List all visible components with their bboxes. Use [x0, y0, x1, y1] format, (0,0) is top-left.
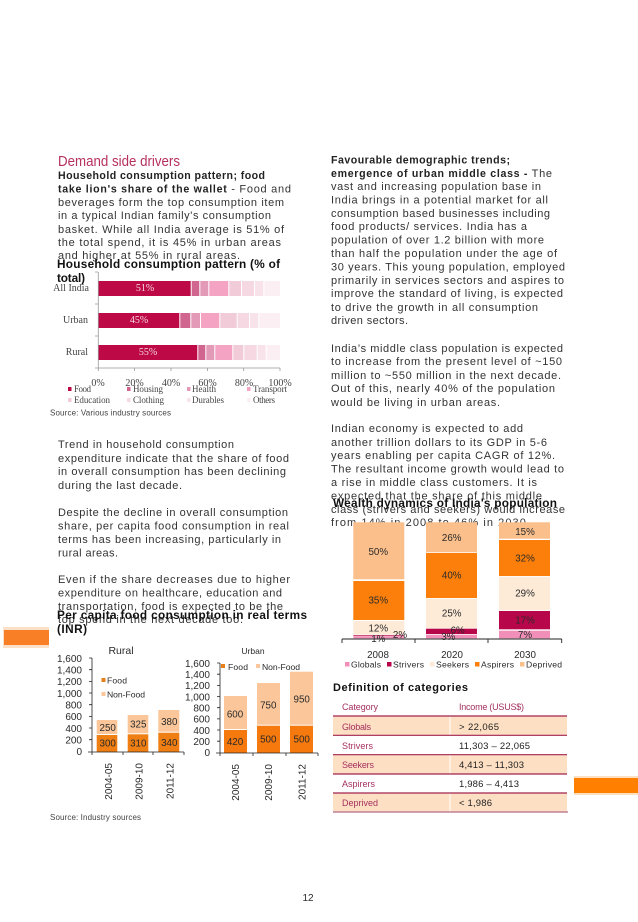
text block: household consumption intro: basket. While all India average is 51% of: [58, 224, 285, 236]
urban value labels: 950: [294, 695, 310, 706]
rural legend: [102, 676, 145, 700]
urban value labels: 600: [227, 709, 244, 720]
legend: Health: [192, 384, 216, 394]
text block: household consumption intro: the total spend, it is 45% in urban areas: [58, 237, 282, 249]
urban y axis labels: 1,200: [185, 681, 210, 692]
urban value labels: 500: [294, 735, 310, 746]
text block: food share trend: Even if the share decreases due to higher: [58, 574, 290, 586]
year labels: [367, 650, 536, 661]
x axis labels: [91, 378, 292, 389]
legend: Education: [74, 395, 110, 405]
urban value labels: 750: [260, 700, 277, 711]
legend: Deprived: [526, 660, 562, 670]
urban value labels: 500: [260, 735, 277, 746]
value labels: 1%: [371, 634, 386, 645]
x axis labels: 80%: [235, 378, 253, 389]
heading: per capita food consumption: Per capita food consumption in real terms: [57, 608, 307, 622]
chart title: Urban: Urban: [241, 646, 265, 656]
rural value labels: 250: [100, 723, 116, 734]
text block: Indian economy: another trillion dollars to its GDP in 5-6: [331, 437, 547, 449]
urban period labels: 2004-05: [231, 764, 242, 801]
text block: food share trend: [58, 439, 290, 626]
row: Seekers: Seekers: [342, 760, 374, 770]
rural y axis labels: 200: [65, 736, 82, 746]
legend: Durables: [192, 395, 224, 405]
text block: household consumption intro: [58, 170, 291, 262]
text block: favourable demographic trends: than half the population under the age of: [331, 248, 558, 260]
value labels: 15%: [515, 527, 535, 538]
legend: Housing: [133, 384, 164, 394]
legend: [68, 384, 287, 405]
legend: [345, 660, 562, 670]
value labels: 25%: [442, 609, 462, 620]
urban legend: Non-Food: [262, 662, 300, 672]
rural value labels: 380: [161, 717, 178, 728]
rural y axis labels: 1,000: [57, 689, 82, 700]
text block: household consumption intro: in a typical Indian family's consumption: [58, 210, 271, 222]
row: Deprived: < 1,986: [459, 798, 492, 809]
rural value labels: 325: [130, 720, 147, 731]
row: Deprived: [342, 798, 492, 809]
legend: Food: [74, 384, 92, 394]
value labels: 2%: [393, 630, 407, 641]
rural period labels: 2004-05: [104, 763, 115, 800]
value labels: 40%: [442, 571, 462, 582]
urban y axis labels: [185, 659, 210, 759]
rural period labels: 2011-12: [166, 763, 176, 799]
rural bars: [97, 710, 179, 752]
bar: Urban: [98, 313, 280, 328]
text block: favourable demographic trends: vast and increasing population base in: [331, 181, 541, 193]
text block: favourable demographic trends: to drive the growth in all consumption: [331, 302, 538, 314]
category labels: Urban: [63, 315, 88, 326]
source note: household chart: Source: Various industry sources: [50, 408, 171, 418]
heading: household consumption pattern chart: total): [57, 271, 85, 285]
text block: Indian economy: years enabling per capita CAGR of 12%.: [331, 450, 555, 462]
heading: household consumption pattern chart: [57, 257, 280, 285]
text block: Indian economy: a rise in middle class customers. It is: [331, 477, 538, 489]
heading: definition of categories: Definition of categories: [333, 682, 468, 694]
rural value labels: 310: [130, 739, 147, 750]
rural y axis labels: 600: [65, 712, 82, 723]
urban y axis labels: 400: [193, 726, 210, 737]
text block: favourable demographic trends: consumption based businesses including: [331, 208, 550, 220]
rural y axis labels: 0: [76, 747, 82, 758]
stacked column chart: wealth dynamics: [342, 522, 562, 670]
urban period labels: [231, 764, 308, 801]
value labels: 26%: [442, 533, 462, 544]
stacked bar chart: rural: [57, 645, 184, 800]
row: Globals: [342, 722, 499, 733]
value labels: 6%: [451, 626, 465, 637]
text block: middle class population: Out of this, nearly 40% of the population: [331, 383, 555, 395]
urban y axis labels: 1,600: [185, 659, 210, 670]
urban y axis labels: 200: [193, 737, 210, 748]
text block: favourable demographic trends: [331, 154, 565, 327]
text block: middle class population: India’s middle class population is expected: [331, 343, 563, 355]
text block: Indian economy: The resultant income growth would lead to: [331, 464, 564, 476]
text block: middle class population: million to ~550 million in the next decade.: [331, 370, 561, 382]
text block: favourable demographic trends: India brings in a potential market for all: [331, 194, 548, 206]
bar: All India: [98, 281, 280, 296]
text block: favourable demographic trends: improve the standard of living, is expected: [331, 288, 563, 300]
text block: food share trend: Trend in household consumption: [58, 439, 234, 451]
text block: Indian economy: expected that the share of this middle: [331, 490, 542, 502]
category labels: [53, 283, 90, 358]
page number: 12: [302, 893, 314, 904]
chart title: Rural: Rural: [108, 645, 134, 657]
text block: food share trend: expenditure on healthcare, education and: [58, 588, 282, 600]
row: Globals: > 22,065: [459, 722, 499, 733]
bar: All India: 51%: [136, 283, 154, 294]
rural y axis labels: 1,600: [57, 654, 82, 665]
stacked bar chart: household consumption pattern: [53, 272, 292, 405]
row: Strivers: [342, 741, 530, 752]
value labels: 35%: [368, 595, 388, 606]
legend: Transport: [253, 384, 287, 394]
year labels: 2030: [514, 650, 536, 661]
heading: household consumption pattern chart: Household consumption pattern (% of: [57, 257, 280, 271]
rural value labels: 300: [100, 739, 116, 750]
text block: Indian economy: [331, 423, 565, 529]
rural value labels: 340: [161, 738, 178, 749]
bar: Urban: 45%: [130, 315, 148, 326]
text block: favourable demographic trends: food products/ services. India has a: [331, 221, 528, 233]
row: Strivers: 11,303 – 22,065: [459, 741, 530, 752]
column: 2020: [426, 522, 477, 638]
value labels: 3%: [441, 632, 456, 643]
text block: household consumption intro: beverages form the top consumption item: [58, 197, 284, 209]
text block: food share trend: transportation, food is expected to be the: [58, 601, 283, 613]
heading: per capita food consumption: (INR): [57, 622, 87, 636]
text block: household consumption intro: take lion's share of the wallet - Food and: [58, 184, 291, 196]
x axis labels: 60%: [198, 378, 217, 389]
legend: Globals: [351, 660, 381, 670]
bar: Rural: 55%: [139, 347, 157, 358]
text block: favourable demographic trends: driven sectors.: [331, 315, 408, 327]
rural y axis labels: [57, 654, 82, 758]
category labels: All India: [53, 283, 90, 294]
heading: wealth dynamics: Wealth dynamics of India's population: [333, 496, 557, 510]
text block: food share trend: during the last decade.: [58, 480, 182, 492]
text block: favourable demographic trends: population of over 1.2 billion with more: [331, 234, 544, 246]
urban y axis labels: 1,000: [185, 692, 210, 703]
x axis labels: 0%: [91, 378, 105, 389]
bar: Rural: [98, 345, 280, 360]
value labels: 50%: [368, 547, 388, 558]
urban period labels: 2011-12: [298, 764, 308, 800]
category labels: Rural: [66, 347, 88, 358]
text block: middle class population: [330, 343, 563, 409]
text block: household consumption intro: Household consumption pattern; food: [58, 170, 265, 182]
text block: Indian economy: from 14% in 2008 to 46% in 2030.: [331, 517, 530, 529]
rural period labels: [104, 763, 176, 800]
row: Strivers: Strivers: [342, 741, 374, 751]
urban y axis labels: 1,400: [185, 670, 210, 681]
row: Aspirers: 1,986 – 4,413: [459, 779, 519, 790]
source note: per capita charts: Source: Industry sources: [50, 813, 141, 822]
row: Deprived: Deprived: [342, 798, 378, 808]
value labels: 32%: [515, 554, 535, 565]
rural y axis labels: 400: [65, 724, 82, 735]
left orange side tab: [3, 627, 49, 648]
legend: Others: [253, 395, 275, 405]
text block: food share trend: top spend in the next decade too.: [58, 614, 243, 626]
stacked bar chart: urban: [185, 646, 318, 801]
urban legend: Food: [228, 662, 248, 672]
row: Globals: Globals: [342, 722, 372, 732]
urban y axis labels: 600: [193, 715, 210, 726]
row: Seekers: [342, 760, 524, 771]
row: Seekers: 4,413 – 11,303: [459, 760, 524, 771]
text block: food share trend: rural areas.: [58, 548, 118, 560]
urban legend: [221, 662, 300, 672]
rural y axis labels: 800: [65, 700, 82, 712]
heading: per capita food consumption: [57, 608, 307, 636]
x axis labels: 20%: [125, 378, 144, 389]
text block: food share trend: in overall consumption has been declining: [58, 466, 286, 478]
urban value labels: 420: [227, 737, 244, 748]
text block: food share trend: terms has been increasing, particularly in: [58, 534, 281, 546]
year labels: 2008: [367, 650, 389, 661]
year labels: 2020: [441, 650, 463, 661]
table header: [342, 702, 524, 712]
right orange side tab: [574, 776, 638, 795]
column: 2008: [353, 522, 404, 638]
row: Aspirers: [342, 779, 519, 790]
column: 2030: [499, 522, 550, 638]
text block: food share trend: Despite the decline in overall consumption: [58, 507, 288, 519]
row: Aspirers: Aspirers: [342, 779, 376, 789]
text block: food share trend: expenditure indicate that the share of food: [58, 453, 289, 465]
text block: household consumption intro: and higher at 55% in rural areas.: [58, 250, 240, 262]
text block: favourable demographic trends: emergence of urban middle class - The: [331, 168, 552, 180]
text block: Indian economy: Indian economy is expected to add: [331, 423, 523, 435]
legend: Seekers: [436, 660, 469, 670]
urban y axis labels: 800: [193, 704, 210, 714]
x axis labels: 100%: [268, 378, 292, 389]
rural y axis labels: 1,400: [57, 666, 82, 676]
value labels: [368, 527, 535, 645]
urban bars: [224, 672, 313, 753]
urban value labels: [227, 695, 310, 748]
value labels: 12%: [368, 624, 388, 635]
text block: favourable demographic trends: primarily in services sectors and aspires to: [331, 275, 564, 287]
x axis labels: 40%: [162, 378, 180, 389]
value labels: 17%: [515, 615, 535, 626]
table header: Income (USUS$): [459, 702, 524, 712]
rural y axis labels: 1,200: [57, 677, 82, 688]
section title: Demand side drivers: Demand side drivers: [58, 154, 180, 170]
text block: middle class population: to increase from the present level of ~150: [331, 356, 562, 368]
rural value labels: [100, 717, 178, 750]
text block: favourable demographic trends: 30 years. This young population, employed: [331, 262, 565, 274]
value labels: 7%: [518, 630, 532, 641]
legend: Strivers: [393, 660, 424, 670]
urban y axis labels: 0: [204, 748, 210, 759]
table: definition of categories: [333, 702, 568, 812]
text block: food share trend: share, per capita food consumption in real: [58, 520, 289, 532]
rural legend: Food: [107, 676, 127, 686]
value labels: 29%: [515, 589, 535, 600]
text block: middle class population: would be living in urban areas.: [330, 397, 500, 409]
legend: Clothing: [133, 395, 164, 405]
rural legend: Non-Food: [107, 690, 145, 700]
table header: Category: [342, 702, 378, 712]
text block: favourable demographic trends: Favourable demographic trends;: [331, 154, 510, 166]
urban period labels: 2009-10: [264, 764, 275, 801]
rural period labels: 2009-10: [134, 763, 146, 800]
legend: Aspirers: [481, 660, 514, 670]
text block: Indian economy: class (strivers and seekers) would increase: [331, 504, 565, 516]
